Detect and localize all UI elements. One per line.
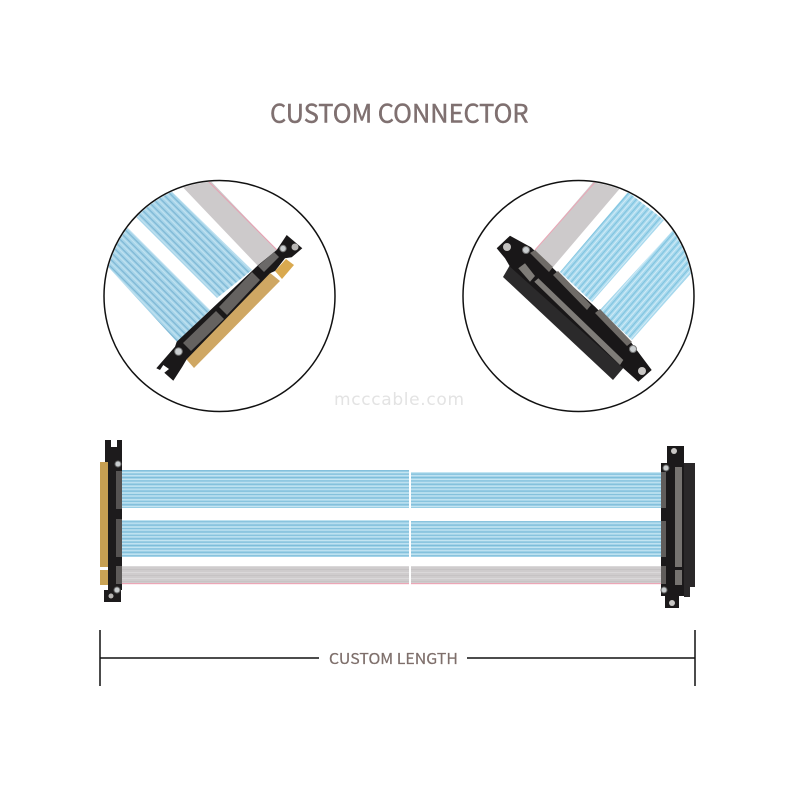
blue ribbon middle left half <box>121 520 409 557</box>
connector solder band <box>595 309 632 346</box>
grey ribbon <box>183 182 276 266</box>
watermark: mcccable.com <box>334 390 464 410</box>
metal contacts short <box>518 263 535 282</box>
bracket hole <box>108 594 114 598</box>
bottom bracket <box>665 594 679 608</box>
connector solder band <box>530 250 553 272</box>
metal contacts long <box>675 467 682 567</box>
gold fingers main <box>100 462 109 567</box>
solder band bottom <box>661 566 666 584</box>
black PCB <box>108 462 122 590</box>
blue ribbon top left half <box>121 470 409 508</box>
connector solder band <box>258 252 279 272</box>
screw bottom <box>661 587 667 593</box>
top bracket <box>105 440 122 462</box>
full cable <box>100 440 695 608</box>
blue ribbon upper <box>560 192 664 302</box>
connector solder band <box>219 272 260 315</box>
connector solder band <box>553 271 591 310</box>
pink edge left half <box>121 583 409 584</box>
circle background <box>104 180 335 412</box>
right connector <box>661 446 695 608</box>
screw upper <box>280 245 286 252</box>
bracket hole lower <box>638 367 646 375</box>
solder band middle <box>661 521 666 557</box>
panel: right connector close-up <box>463 180 698 412</box>
slot housing <box>684 463 695 597</box>
metal contacts short <box>675 570 682 585</box>
black PCB <box>661 463 684 596</box>
black slot housing <box>503 265 625 380</box>
blue ribbon middle right half <box>411 521 662 557</box>
black PCB and bracket <box>156 235 302 381</box>
screw upper <box>522 246 530 254</box>
clipped left connector detail <box>108 182 302 381</box>
screw top <box>115 461 121 467</box>
pink edge <box>206 179 277 250</box>
solder band middle <box>116 519 122 557</box>
pink edge <box>535 180 597 250</box>
circle outline <box>104 180 335 412</box>
screw bottom <box>114 587 120 593</box>
bracket hole <box>292 244 298 250</box>
solder band top <box>661 472 666 508</box>
grey ribbon <box>535 180 622 267</box>
connector solder band <box>183 311 224 351</box>
clipped right connector detail <box>497 180 698 382</box>
circle background <box>463 180 694 412</box>
screw top <box>663 465 669 471</box>
blue ribbon lower <box>108 228 210 342</box>
top bracket <box>667 446 684 464</box>
dimension line <box>100 630 695 686</box>
solder band bottom <box>116 566 122 584</box>
metal contacts long <box>534 278 623 365</box>
pink edge right half <box>411 583 662 584</box>
screw lower <box>175 348 182 355</box>
gold fingers short <box>100 570 109 585</box>
circle outline <box>463 180 694 412</box>
gold fingers short <box>275 259 294 279</box>
solder band top <box>116 471 122 509</box>
gold fingers main <box>186 273 280 368</box>
bracket hole top <box>671 448 677 454</box>
black PCB and bracket <box>497 236 652 382</box>
left connector <box>100 440 122 602</box>
bottom bracket <box>104 590 121 602</box>
dimension label: CUSTOM LENGTH <box>329 648 458 669</box>
panel: left connector close-up <box>88 175 335 412</box>
blue ribbon lower <box>600 230 698 340</box>
title: CUSTOM CONNECTOR <box>270 94 528 130</box>
bracket hole upper <box>503 243 511 251</box>
blue ribbon upper <box>136 192 252 298</box>
bracket hole bottom <box>669 600 675 606</box>
grey ribbon left half <box>121 566 409 584</box>
blue ribbon top right half <box>411 472 662 508</box>
grey ribbon right half <box>411 566 662 584</box>
screw lower <box>630 346 636 352</box>
